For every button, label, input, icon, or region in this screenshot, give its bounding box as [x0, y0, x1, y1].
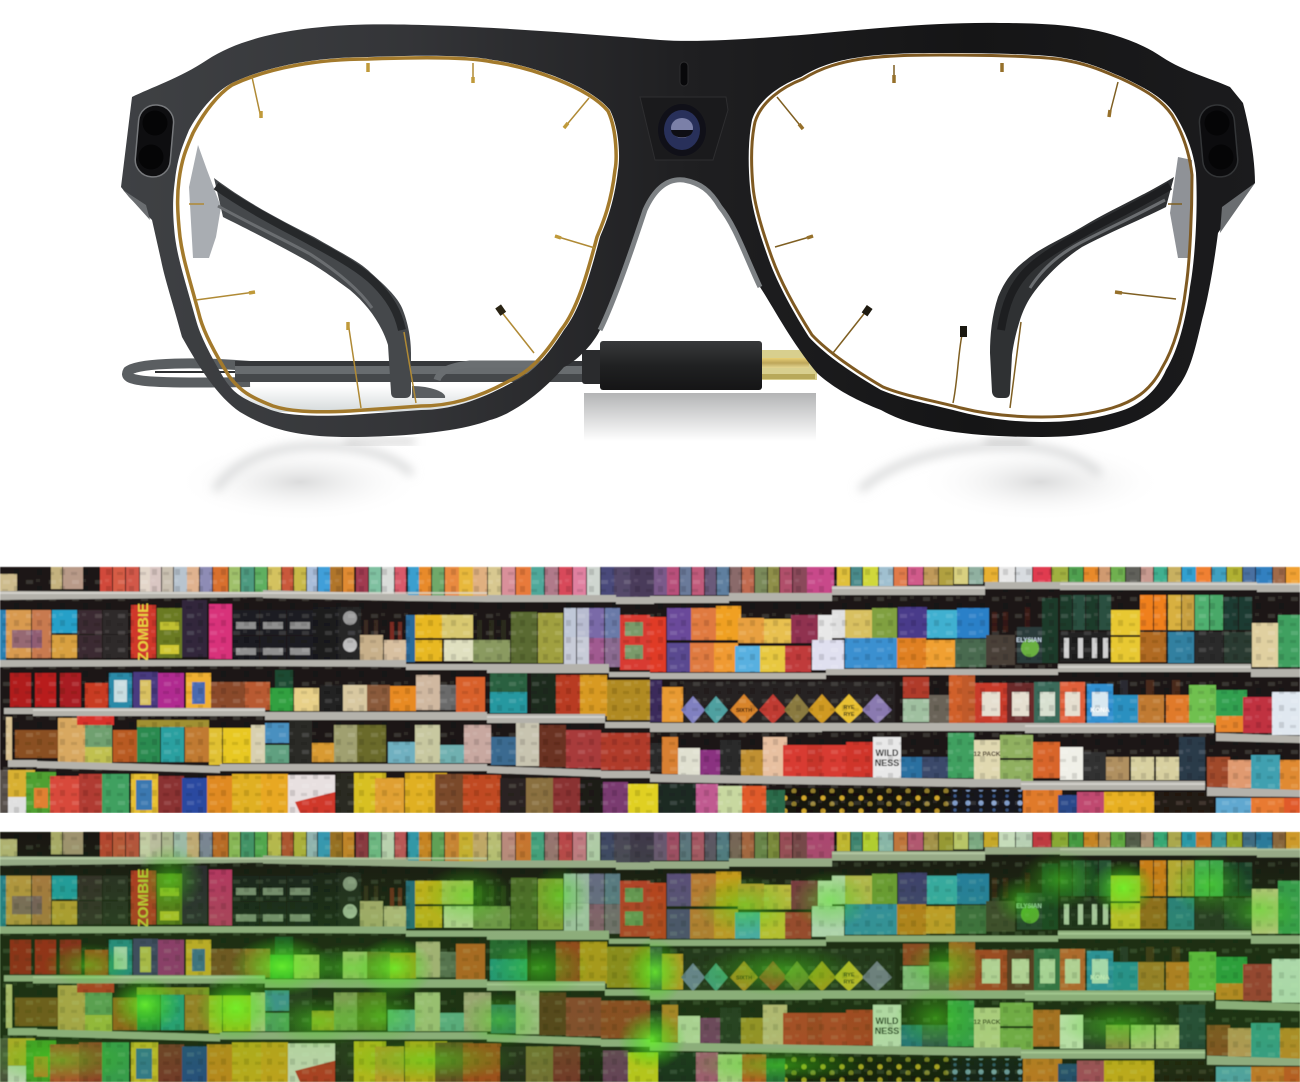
temple arm right — [990, 157, 1192, 398]
metal shelf edges — [0, 582, 1300, 797]
antenna ticks left lens — [189, 63, 595, 408]
printed package labels: KONA — [1090, 707, 1110, 714]
printed package labels: NESS — [875, 758, 899, 768]
antenna ticks right lens — [775, 63, 1182, 408]
product photo: eye-tracking glasses — [121, 23, 1255, 522]
printed package labels: RYE — [843, 705, 855, 711]
lens reflection tint — [240, 386, 500, 412]
fourth row of bottles and cans — [6, 708, 1300, 790]
second row of boxes — [0, 595, 1300, 672]
panel: gaze heatmap over shelf photo — [0, 832, 1300, 1082]
printed package labels: WILD — [876, 748, 899, 758]
heatmap base shelf image — [0, 832, 1300, 1082]
third row of six-packs — [10, 670, 1300, 735]
top row of cans — [0, 567, 1300, 597]
printed package labels: RYE — [843, 712, 855, 718]
right eye camera pod — [1198, 104, 1239, 178]
gold antenna ring left lens — [178, 58, 616, 412]
scene camera module — [640, 97, 728, 160]
printed package labels: 12 PACK — [974, 751, 1001, 758]
printed package labels — [135, 603, 1110, 768]
shelf highlights — [0, 583, 1300, 785]
package label texture — [0, 567, 1300, 813]
green tint — [0, 832, 1300, 1082]
printed package labels: ZOMBIE — [135, 603, 152, 661]
nose bridge highlight — [600, 180, 760, 330]
printed package labels: ELYSIAN — [1016, 638, 1042, 644]
panel: store shelf photo — [0, 567, 1300, 813]
shelf back wall — [0, 567, 1300, 813]
front microphone slot — [680, 62, 688, 86]
glasses frame — [121, 23, 1255, 437]
left eye camera pod — [134, 104, 175, 178]
temple arm left — [189, 145, 411, 398]
bottom row of cases — [0, 770, 1300, 813]
connector with gold plug — [582, 341, 817, 390]
cable — [127, 361, 590, 398]
gold antenna ring right lens — [752, 55, 1192, 417]
side facet highlights — [123, 183, 1255, 233]
white gap between photos — [0, 813, 1300, 832]
mid-shelf green wash — [0, 832, 1300, 1082]
printed package labels: SIXTH — [736, 708, 752, 714]
floor reflections — [175, 393, 1165, 522]
gaze heat blobs — [0, 844, 1300, 1082]
